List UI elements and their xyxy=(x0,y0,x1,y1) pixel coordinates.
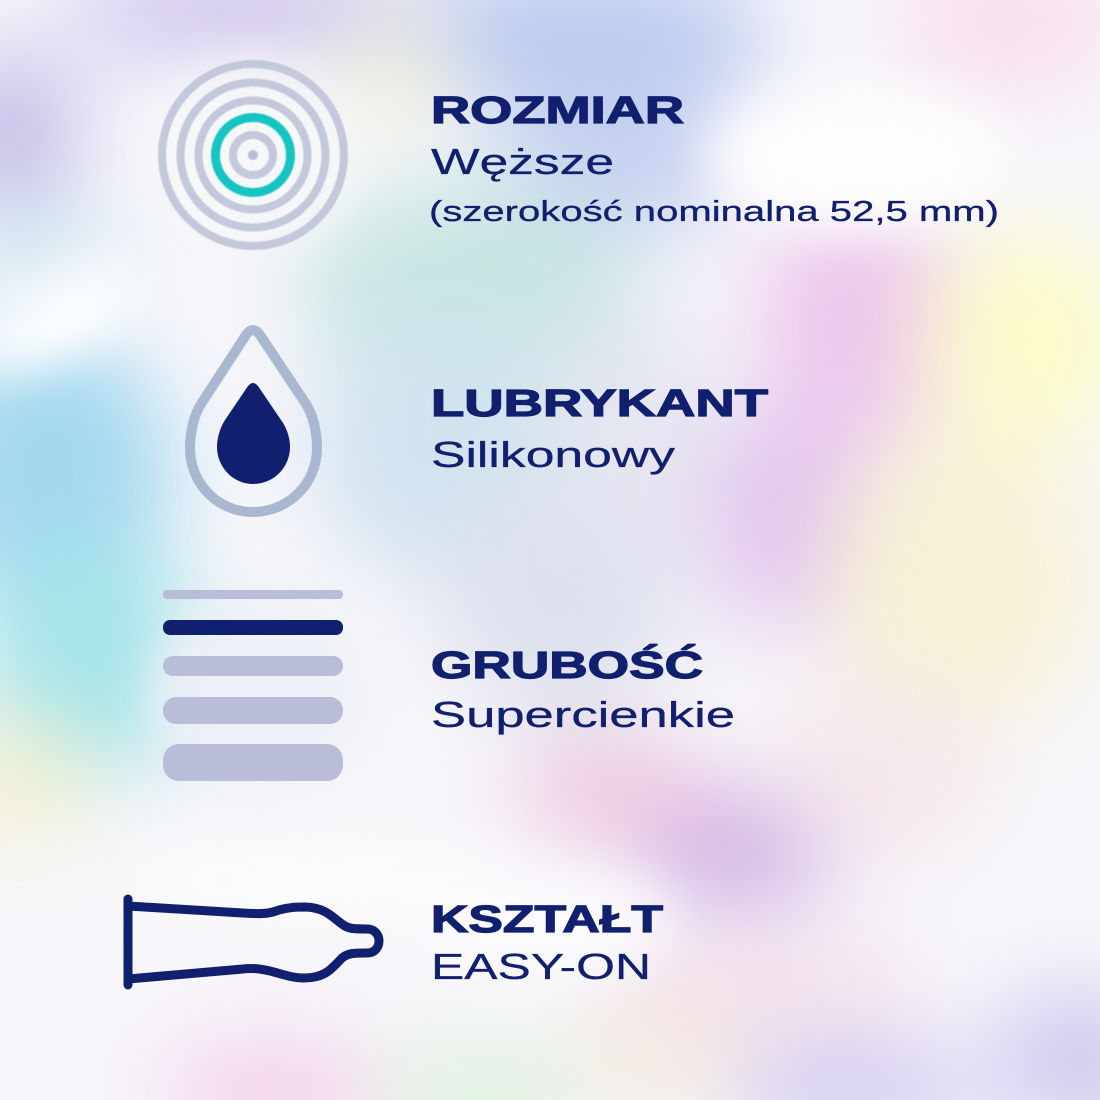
text: lubricant: Silikonowy xyxy=(431,434,675,475)
text: thickness: GRUBOŚĆ xyxy=(431,643,703,687)
text: shape: KSZTAŁT xyxy=(431,899,663,941)
text: shape: EASY-ON xyxy=(431,946,651,987)
text: lubricant xyxy=(431,383,768,475)
icon: concentric rings (size) xyxy=(162,64,344,246)
text: shape xyxy=(431,899,663,987)
text: size xyxy=(429,90,999,228)
text: thickness: Supercienkie xyxy=(431,694,735,735)
icon: thickness bars xyxy=(163,590,343,781)
text: thickness xyxy=(431,643,735,735)
text: lubricant: LUBRYKANT xyxy=(431,383,768,425)
icon: condom outline (shape) xyxy=(128,899,379,985)
text: size: ROZMIAR xyxy=(431,90,684,132)
text: size: (szerokość nominalna 52,5 mm) xyxy=(429,196,999,228)
text: size: Węższe xyxy=(431,141,614,182)
icon: lubricant drop xyxy=(190,330,317,512)
